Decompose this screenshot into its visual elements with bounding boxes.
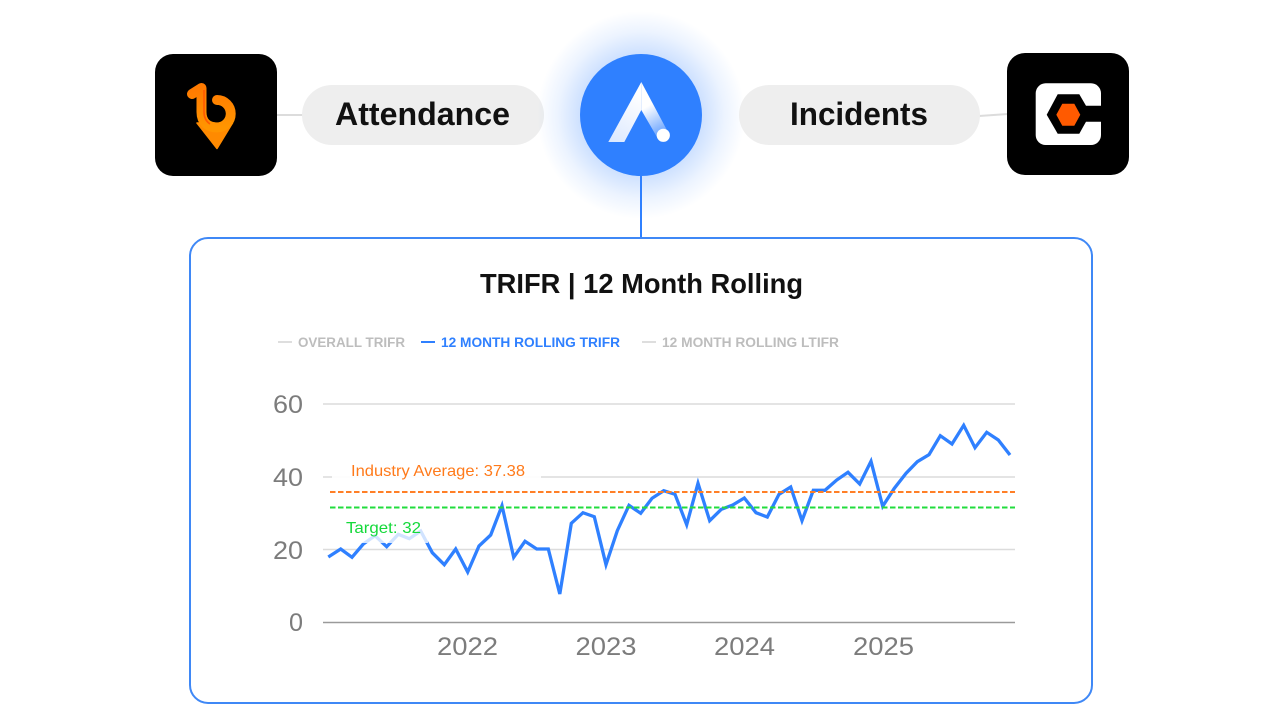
pill: incidents: Incidents [790, 96, 928, 132]
label: target [346, 516, 428, 543]
connector: incidents to right logo [979, 114, 1008, 116]
connector: attendance to hub [543, 114, 581, 116]
label: industry average: Industry Average: 37.38 [351, 463, 525, 480]
connector: hub to incidents [701, 114, 740, 116]
x axis labels: 2022 [437, 633, 498, 661]
x axis labels: 2023 [576, 633, 636, 661]
pill: incidents [739, 85, 980, 145]
icon: attendance app logo [155, 54, 277, 176]
y axis labels: 60 [273, 391, 303, 419]
series: 12 month rolling TRIFR [328, 425, 1010, 594]
legend item: 12 month rolling TRIFR: 12 MONTH ROLLING TRIFR [441, 335, 620, 350]
icon: incidents app logo [1007, 53, 1129, 175]
pill: attendance [302, 85, 544, 145]
legend item: 12 month rolling LTIFR: 12 MONTH ROLLING LTIFR [662, 335, 839, 350]
y axis labels: 0 [289, 609, 303, 637]
x axis labels: 2024 [714, 633, 775, 661]
icon: hub glow [537, 11, 745, 219]
connector: left logo to attendance [277, 114, 303, 116]
heading: chart title: TRIFR | 12 Month Rolling [480, 268, 803, 299]
legend item: overall TRIFR: OVERALL TRIFR [298, 335, 405, 350]
pill: attendance: Attendance [335, 96, 510, 132]
reference line: industry average [330, 491, 1015, 493]
panel: chart card [190, 238, 1092, 703]
line chart [273, 391, 1015, 661]
x axis labels [437, 633, 914, 661]
y axis labels [273, 391, 303, 637]
legend [278, 335, 839, 350]
y axis labels: 20 [273, 537, 303, 565]
x axis labels: 2025 [853, 633, 914, 661]
label: target: Target: 32 [346, 520, 421, 537]
y axis labels: 40 [273, 464, 303, 492]
icon: central hub logo [580, 54, 702, 176]
connector: hub to chart card [640, 176, 642, 238]
reference line: target [330, 506, 1015, 508]
